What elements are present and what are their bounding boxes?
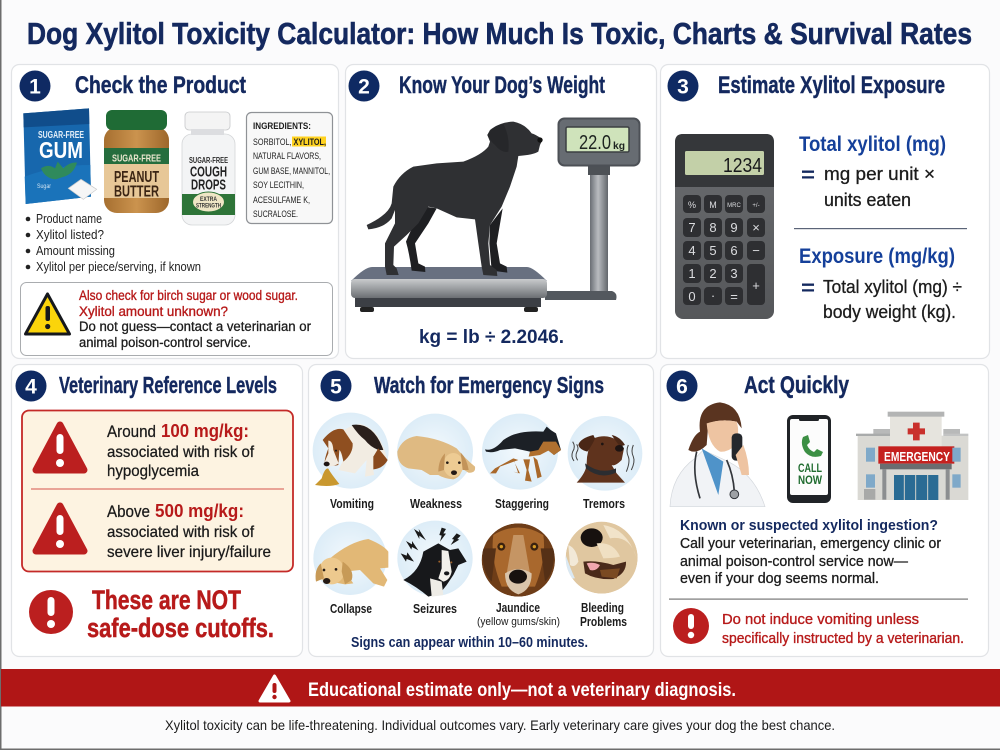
callout: amount unknown warning <box>20 282 332 356</box>
level: 100 mg/kg: Around <box>107 423 156 441</box>
number badge 4 <box>16 370 46 402</box>
sign: tremors: Tremors <box>583 496 625 511</box>
icon: cough drops bottle: STRENGTH <box>196 204 221 210</box>
heading: know your dog's weight: Know Your Dog’s Weight <box>399 72 605 99</box>
checklist: Xylitol per piece/serving, if known <box>36 260 201 274</box>
illustration: calculator: 8 <box>709 220 717 235</box>
sign: jaundice: (yellow gums/skin) <box>477 616 560 628</box>
level: 100 mg/kg: 100 mg/kg: <box>161 421 249 441</box>
sign: tremors <box>568 416 642 511</box>
reference levels box <box>22 410 293 572</box>
level: 500 mg/kg: associated with risk of <box>107 524 255 541</box>
illustration: calculator: · <box>711 288 715 303</box>
illustration: calculator: × <box>752 220 760 235</box>
icon: phone call now: NOW <box>798 473 823 487</box>
icon: phone call now: CALL <box>798 461 822 475</box>
number badge 5: 5 <box>330 376 342 398</box>
formula: exposure: Exposure (mg/kg) <box>799 245 955 268</box>
ingredients label: SUCRALOSE. <box>253 209 298 219</box>
formula: total xylitol: = <box>801 164 815 187</box>
sign: weakness <box>397 414 475 511</box>
icon: peanut butter jar: BUTTER <box>114 184 159 200</box>
illustration: emergency hospital <box>856 412 968 500</box>
illustration: calculator: M <box>709 200 717 210</box>
level: 500 mg/kg: 500 mg/kg: <box>155 501 244 521</box>
sign: vomiting: Vomiting <box>330 496 374 511</box>
onset timing note: Signs can appear within 10–60 minutes. <box>351 634 588 651</box>
action instructions <box>680 518 941 587</box>
ingredients label: NATURAL FLAVORS, <box>253 151 321 161</box>
sign: bleeding problems <box>566 522 638 629</box>
level: 500 mg/kg: severe liver injury/failure <box>107 544 271 561</box>
action instructions: Call your veterinarian, emergency clinic or <box>680 536 941 552</box>
level: 100 mg/kg <box>107 421 255 480</box>
formula: total xylitol <box>799 133 946 210</box>
illustration: calculator: = <box>730 289 738 304</box>
level: 100 mg/kg: hypoglycemia <box>107 463 199 480</box>
illustration: calculator: + <box>752 278 760 293</box>
illustration: calculator: 5 <box>709 243 717 258</box>
sign: bleeding problems: Bleeding <box>581 600 624 615</box>
illustration: calculator: 1 <box>688 266 696 281</box>
sign: vomiting <box>313 413 389 511</box>
illustration: floor scale with display: 22.0 <box>579 132 611 154</box>
illustration: calculator: 6 <box>730 243 738 258</box>
heading: watch for emergency signs: Watch for Emergency Signs <box>374 372 604 398</box>
panel 4: veterinary reference levels <box>12 364 302 656</box>
sign: staggering <box>482 414 561 511</box>
warning: not safe-dose cutoffs: These are NOT <box>92 585 241 615</box>
red disclaimer banner: Educational estimate only—not a veterinary diagnosis. <box>308 680 736 701</box>
red disclaimer banner <box>1 669 1000 706</box>
illustration: calculator: 0 <box>688 289 696 304</box>
action instructions: Known or suspected xylitol ingestion? <box>680 518 938 534</box>
sign: collapse <box>313 522 388 616</box>
icon: cough drops bottle: EXTRA <box>200 197 218 203</box>
ingredients label: SOY LECITHIN, <box>253 180 304 190</box>
illustration: veterinarian on phone <box>670 402 765 507</box>
heading: check the product: Check the Product <box>75 72 246 99</box>
illustration: calculator: 3 <box>730 266 738 281</box>
number badge 6: 6 <box>676 376 688 398</box>
icon: sugar-free gum pack: SUGAR-FREE <box>38 130 84 141</box>
callout: amount unknown warning: Do not guess—contact a veterinarian or <box>79 319 311 334</box>
number badge 4: 4 <box>25 376 37 398</box>
panel 2: know your dog's weight <box>346 64 656 358</box>
sign: seizures: Seizures <box>413 601 457 616</box>
icon: sugar-free gum pack: Sugar <box>37 184 51 190</box>
formula: exposure <box>799 245 962 322</box>
sign: seizures <box>397 521 473 616</box>
sign: staggering: Staggering <box>495 496 549 511</box>
footer note: Xylitol toxicity can be life-threatening. Individual outcomes vary. Early veterinary care gives your dog the best chance. <box>165 717 835 733</box>
illustration: calculator: +/- <box>752 203 760 209</box>
illustration: floor scale with display: kg <box>613 141 625 152</box>
number badge 2: 2 <box>358 76 370 98</box>
illustration: calculator: % <box>688 200 696 210</box>
number badge 2 <box>348 70 380 102</box>
sign: jaundice <box>477 523 560 628</box>
action instructions: even if your dog seems normal. <box>680 571 879 587</box>
illustration: calculator <box>675 134 774 319</box>
ingredients label: INGREDIENTS: <box>253 121 311 131</box>
icon: peanut butter jar: SUGAR-FREE <box>112 152 161 164</box>
illustration: floor scale with display <box>351 118 640 312</box>
checklist: Product name <box>36 212 102 226</box>
panel 6: act quickly <box>660 364 988 656</box>
illustration: black dog standing on scale <box>367 122 543 276</box>
warning: not safe-dose cutoffs: safe-dose cutoffs. <box>87 613 274 643</box>
icon: peanut butter jar <box>104 110 169 213</box>
checklist: Amount missing <box>36 244 115 258</box>
checklist <box>26 212 201 274</box>
formula: exposure: Total xylitol (mg) ÷ <box>823 277 962 297</box>
illustration: calculator: 1234 <box>723 155 762 177</box>
checklist: Xylitol listed? <box>36 228 104 242</box>
illustration: calculator: MRC <box>727 203 741 209</box>
formula: total xylitol: mg per unit × <box>824 164 935 184</box>
icon: phone call now <box>787 415 831 503</box>
sign: bleeding problems: Problems <box>580 614 627 629</box>
warning: do not induce vomiting: specifically instructed by a veterinarian. <box>722 630 964 647</box>
icon: sugar-free gum pack: GUM <box>39 137 83 163</box>
conversion formula: kg = lb ÷ 2.2046. <box>419 326 564 348</box>
icon: red warning triangle 2 <box>36 506 84 551</box>
icon: sugar-free gum pack <box>23 108 97 204</box>
icon: white warning triangle <box>260 676 289 701</box>
illustration: calculator: − <box>752 243 760 258</box>
panel 3: estimate xylitol exposure <box>660 64 990 358</box>
icon: red exclamation circle <box>29 590 73 634</box>
formula: exposure: = <box>801 277 815 300</box>
number badge 3: 3 <box>677 76 689 98</box>
heading: act quickly: Act Quickly <box>744 372 850 399</box>
ingredients label: SORBITOL, XYLITOL, <box>253 137 326 147</box>
action instructions: animal poison-control service now— <box>680 554 908 570</box>
sign: jaundice: Jaundice <box>496 600 540 615</box>
panel 5: watch for emergency signs <box>308 364 654 656</box>
callout: amount unknown warning: Xylitol amount unknown? <box>79 304 228 319</box>
illustration: calculator: 4 <box>688 243 696 258</box>
ingredients label <box>246 112 332 224</box>
icon: cough drops bottle: SUGAR-FREE <box>189 156 228 165</box>
sign: weakness: Weakness <box>410 496 462 511</box>
icon: yellow warning triangle <box>26 294 70 334</box>
panel 1: check the product <box>12 64 338 358</box>
formula: total xylitol: units eaten <box>824 190 911 210</box>
icon: red exclamation circle <box>673 608 709 644</box>
number badge 6 <box>666 370 698 402</box>
ingredients label: ACESULFAME K, <box>253 195 310 205</box>
number badge 3 <box>668 70 698 102</box>
level: 500 mg/kg <box>107 501 271 561</box>
illustration: calculator: 9 <box>730 220 738 235</box>
number badge 1 <box>20 70 50 102</box>
formula: total xylitol: Total xylitol (mg) <box>799 133 946 156</box>
illustration: calculator: 2 <box>709 266 717 281</box>
level: 100 mg/kg: associated with risk of <box>107 444 255 461</box>
icon: cough drops bottle <box>182 112 235 225</box>
warning: do not induce vomiting: Do not induce vomiting unless <box>722 611 919 628</box>
warning: do not induce vomiting <box>722 611 964 647</box>
icon: red warning triangle 1 <box>36 425 84 470</box>
number badge 5 <box>320 370 352 402</box>
heading: veterinary reference levels: Veterinary Reference Levels <box>59 372 277 398</box>
sign: collapse: Collapse <box>330 601 372 616</box>
formula: exposure: body weight (kg). <box>823 302 956 322</box>
callout: amount unknown warning: Also check for birch sugar or wood sugar. <box>79 288 298 303</box>
illustration: calculator: 7 <box>688 220 696 235</box>
icon: cough drops bottle: DROPS <box>191 178 226 194</box>
level: 500 mg/kg: Above <box>107 503 150 521</box>
callout: amount unknown warning: animal poison-control service. <box>79 335 251 350</box>
number badge 1: 1 <box>29 76 41 98</box>
warning: not safe-dose cutoffs <box>87 585 274 643</box>
icon: peanut butter jar: PEANUT <box>114 169 159 186</box>
ingredients label: GUM BASE, MANNITOL, <box>253 166 330 176</box>
emergency sign label: EMERGENCY <box>884 449 950 464</box>
icon: cough drops bottle: COUGH <box>190 164 227 180</box>
